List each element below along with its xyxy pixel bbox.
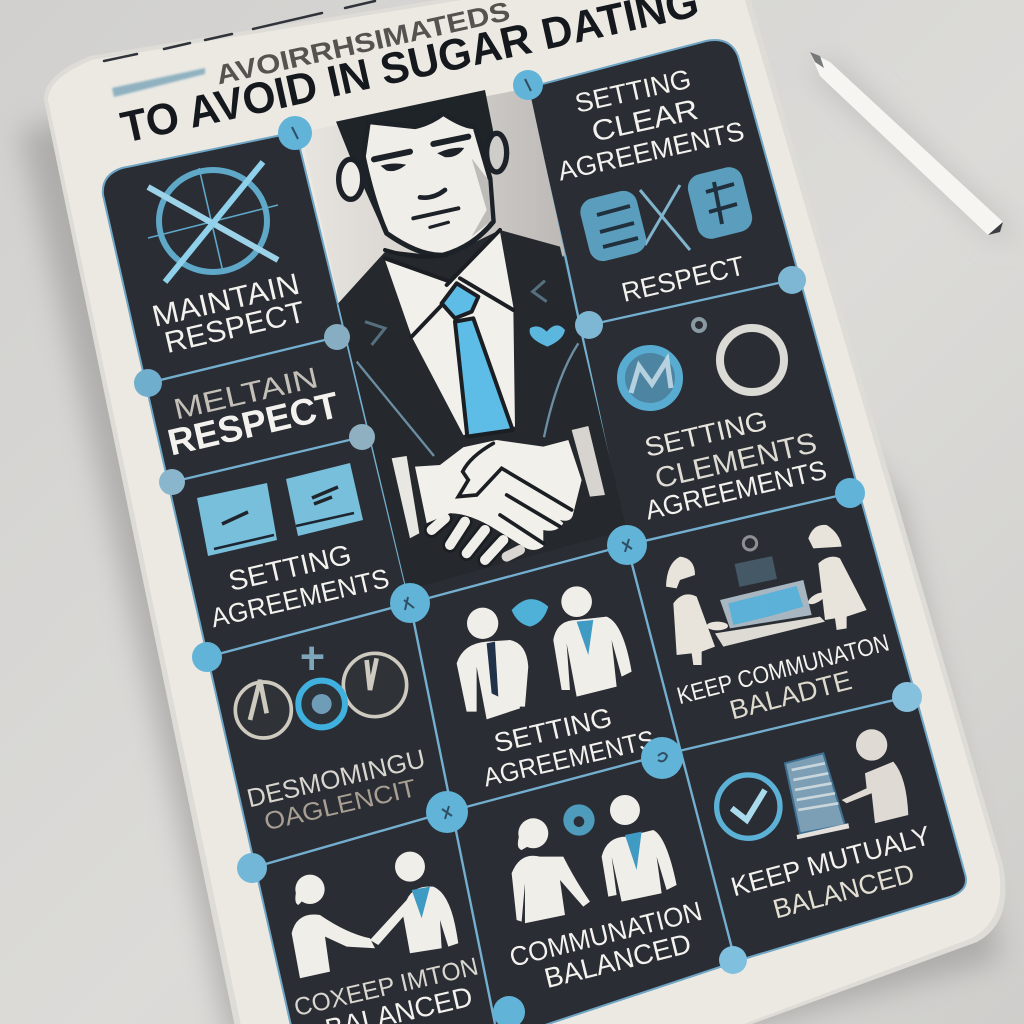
handshake [392,426,605,560]
facial features [374,137,468,227]
title block [104,0,703,153]
label: SETTING [572,64,694,119]
lapel heart pin [530,325,565,347]
panel: keep mutually balanced [717,729,934,925]
portrait backdrop [301,88,565,305]
panel: desmoninge agreement: OAGLENCIT [262,774,419,836]
icon: linked documents [577,164,755,264]
panel: communication balanced: BALANCED [541,928,694,994]
icon: linked rings [235,647,407,738]
pen [810,52,1012,240]
garbled subtitle: AVOIRRHSIMATEDS [213,0,513,90]
panel: maintain respect [148,162,308,360]
panel: setting clements agreements: CLEMENTS [652,427,820,495]
shirt [385,232,515,435]
label: KEEP MUTUALY [728,820,934,902]
label: COMMUNATION [507,896,705,973]
icon: crossed compass [148,162,278,282]
label: SETTING [491,702,615,758]
panel: setting clements agreements: AGREEMENTS [642,455,829,526]
label: SETTING [225,539,354,597]
icon: medallion and ring [621,319,784,407]
label: SETTING [642,406,770,463]
icon: blue cards [197,463,363,556]
label: DESMOMINGU [244,743,428,813]
header dashes [104,1,375,61]
panel: keep balanced handshake [291,852,481,1024]
panel: setting agreements center: AGREEMENTS [480,724,658,793]
panel: setting clear agreements: AGREEMENTS [555,116,747,187]
blue header smear [112,68,205,97]
panel: setting clear agreements [555,64,755,308]
ears [339,159,363,199]
panel: setting clements agreements [621,319,829,526]
panel: maintain respect: RESPECT [161,296,308,360]
grid lines [148,255,907,1024]
central figure [336,90,627,590]
panel: desmoninge agreement [235,647,428,836]
label: respect: RESPECT [619,251,747,308]
collar [385,230,513,337]
fingers [432,518,520,560]
label: KEEP COMMUNATON [674,629,892,710]
grid connector nodes [134,70,922,1024]
panel: setting agreements left: AGREEMENTS [208,563,392,633]
panel: setting agreements left [197,463,392,633]
icon: two women at a laptop [666,525,867,665]
lapel lines [357,281,578,456]
icon: two figures shaking hands [292,852,458,978]
face [363,113,493,255]
panel: keep communication: BALADTE [726,665,855,725]
suit [338,230,627,590]
panel: meltain respect: MELTAIN [171,362,321,426]
label: COXEEP IMTON [291,952,481,1022]
panel: setting agreements center [457,586,658,793]
label: MAINTAIN [149,268,303,334]
hair [336,90,495,223]
icon: woman and man [512,795,677,923]
tie [442,283,513,437]
panel: keep communication [666,525,892,725]
icon: two businessmen [457,586,632,719]
panel: keep mutually balanced: BALANCED [770,858,918,925]
panel: communication balanced [507,795,705,994]
icon: check and document [717,729,908,839]
face shading [472,158,491,237]
panel: setting clear agreements: CLEAR [589,94,701,149]
panel: meltain respect: RESPECT [164,384,343,463]
